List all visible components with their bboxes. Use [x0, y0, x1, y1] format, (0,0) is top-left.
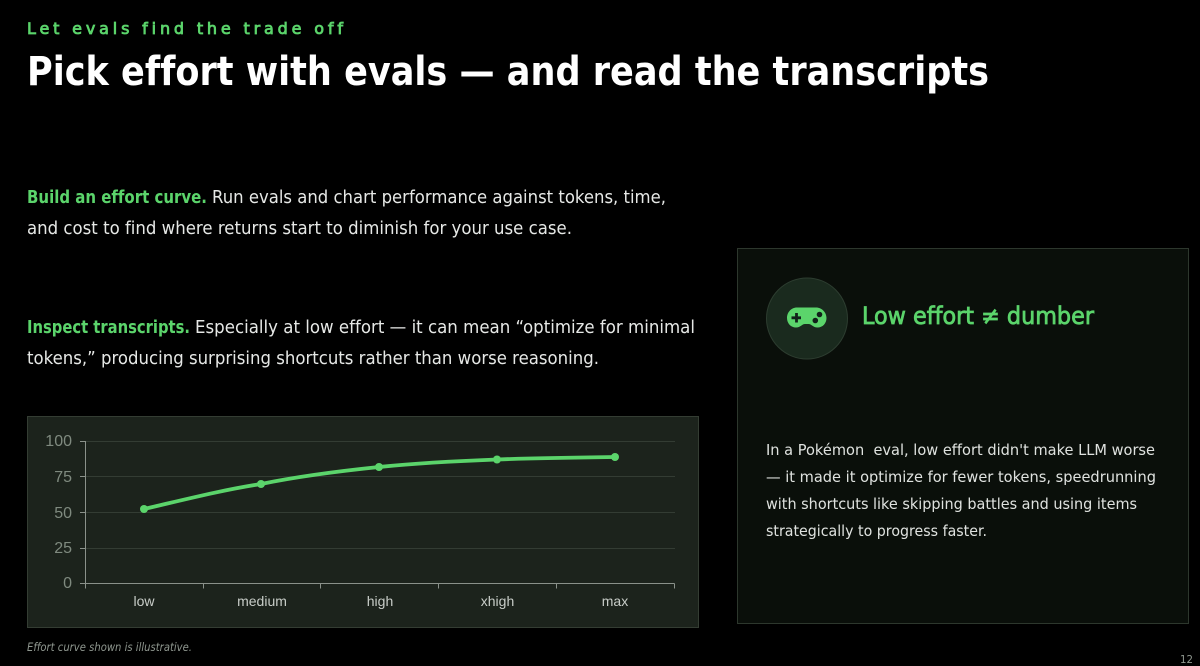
x axis labels: max	[602, 593, 628, 609]
icon: game controller	[766, 278, 848, 359]
text block: inspect transcripts	[27, 317, 695, 369]
callout body: with shortcuts like skipping battles and using items	[766, 495, 1137, 513]
chart axes	[80, 442, 674, 588]
y axis labels	[45, 433, 72, 592]
line series	[144, 457, 615, 509]
y axis labels: 50	[54, 505, 72, 522]
y axis labels: 100	[45, 433, 72, 450]
y axis labels: 0	[63, 575, 72, 592]
panel: low effort callout	[738, 248, 1188, 624]
callout body: In a Pokémon eval, low effort didn't make LLM worse	[766, 441, 1155, 459]
callout body	[766, 441, 1156, 540]
text block: inspect transcripts: Inspect transcripts.	[27, 317, 190, 338]
callout body: strategically to progress faster.	[766, 522, 987, 540]
x axis labels: xhigh	[481, 593, 514, 609]
panel: effort curve chart	[28, 416, 698, 628]
text block: build an effort curve: Run evals and chart performance against tokens, time,	[212, 187, 666, 208]
footnote: Effort curve shown is illustrative.	[27, 640, 192, 654]
y axis labels: 25	[54, 540, 72, 557]
page number: 12	[1180, 653, 1193, 666]
text block: inspect transcripts: tokens,” producing surprising shortcuts rather than worse reasoning.	[27, 348, 599, 369]
text block: inspect transcripts: Especially at low effort — it can mean “optimize for minimal	[195, 317, 695, 338]
x axis labels: low	[133, 593, 155, 609]
callout heading: Low effort ≠ dumber	[862, 302, 1094, 330]
callout body: — it made it optimize for fewer tokens, speedrunning	[766, 468, 1156, 486]
y axis labels: 75	[54, 469, 72, 486]
x axis labels: medium	[237, 593, 287, 609]
text block: build an effort curve	[27, 187, 666, 239]
text block: build an effort curve: Build an effort curve.	[27, 187, 207, 208]
text block: build an effort curve: and cost to find where returns start to diminish for your use case.	[27, 218, 572, 239]
x axis labels	[133, 593, 628, 609]
data points	[140, 453, 619, 513]
x axis labels: high	[367, 593, 393, 609]
eyebrow: Let evals find the trade off	[27, 19, 343, 38]
title: Pick effort with evals — and read the transcripts	[27, 49, 989, 95]
